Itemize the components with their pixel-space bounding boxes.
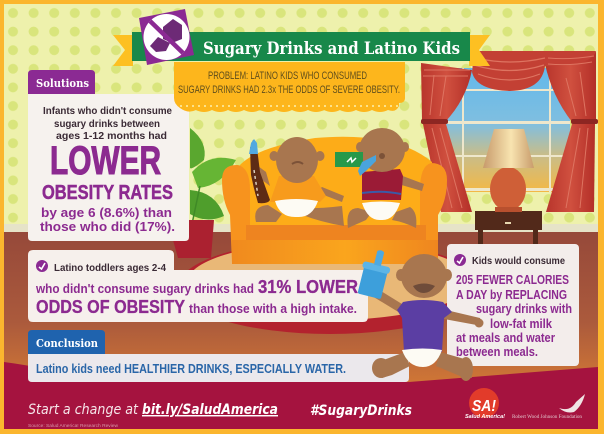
solutions card [28, 94, 189, 241]
conclusion text: Latino kids need HEALTHIER DRINKS, ESPECIALLY WATER. [36, 362, 346, 376]
logo: Salud America [465, 388, 505, 420]
baby on left with cola bottle [249, 137, 344, 226]
plant [173, 128, 236, 258]
kids finding: sugary drinks with [476, 301, 572, 316]
problem lace [180, 105, 400, 107]
conclusion tab: Conclusion [36, 337, 98, 350]
icon: no sugary drinks stamp [139, 9, 194, 65]
solutions tab: Solutions [36, 77, 89, 90]
text panel: toddlers [28, 250, 368, 322]
lamp shade [483, 129, 534, 168]
toddlers finding: 31% LOWER [258, 277, 358, 297]
curtains [421, 51, 598, 212]
footer call to action: bit.ly/SaludAmerica [142, 402, 278, 418]
green bottle [335, 152, 363, 167]
solutions tab [28, 70, 95, 94]
curtain swag [423, 51, 596, 91]
conclusion card [28, 354, 409, 382]
text panel: solutions [28, 70, 189, 241]
hashtag: #SugaryDrinks [310, 403, 412, 419]
sippy cup [358, 155, 376, 176]
logo: Salud America: Salud America! [465, 414, 505, 420]
text panel: kids would consume [447, 244, 579, 366]
title banner [113, 32, 490, 66]
kids finding: 205 FEWER CALORIES [456, 272, 569, 287]
toddlers card [28, 250, 368, 322]
sofa [222, 137, 447, 264]
right curtain [545, 52, 598, 212]
solutions rates text [40, 205, 175, 234]
solutions headline: LOWER [50, 139, 161, 183]
toddlers finding: than those with a high intake. [189, 301, 357, 316]
problem text [178, 70, 400, 96]
problem text: PROBLEM: LATINO KIDS WHO CONSUMED [208, 70, 367, 82]
title: Sugary Drinks and Latino Kids [203, 39, 460, 59]
floor [4, 232, 598, 382]
solutions rates text: those who did (17%). [40, 219, 175, 234]
source line: Source: Salud America! Research Review [28, 423, 119, 428]
kids finding: between meals. [456, 344, 538, 359]
solutions intro text: ages 1-12 months had [56, 130, 167, 142]
problem text: SUGARY DRINKS HAD 2.3x THE ODDS OF SEVERE OBESITY. [178, 84, 400, 96]
baby on right with sippy cup [335, 128, 424, 228]
lamp and side table [475, 129, 542, 244]
blue sippy cup [356, 247, 394, 300]
icon: check [36, 260, 48, 272]
kids finding [456, 272, 572, 359]
cola bottle [249, 139, 270, 203]
solutions headline [42, 139, 173, 204]
lamp base [490, 167, 526, 212]
solutions rates text: by age 6 (8.6%) than [41, 205, 172, 220]
footer call to action: Start a change at [28, 402, 139, 418]
solutions intro text: Infants who didn't consume [43, 105, 172, 117]
kids label: Kids would consume [472, 255, 565, 267]
toddlers finding: who didn't consume sugary drinks had [35, 281, 254, 296]
kids card [447, 244, 579, 366]
left curtain [421, 63, 472, 212]
solutions intro text: sugary drinks between [54, 118, 160, 130]
kids finding: at meals and water [456, 330, 555, 345]
solutions intro text [43, 105, 172, 142]
window [445, 68, 570, 192]
icon: check [454, 254, 466, 266]
logo: Robert Wood Johnson Foundation: Robert Wood Johnson Foundation [512, 415, 583, 420]
kids finding: low-fat milk [490, 316, 553, 331]
problem panel [174, 62, 405, 112]
toddlers finding [35, 277, 358, 317]
footer band [4, 362, 598, 429]
solutions headline: OBESITY RATES [42, 182, 173, 204]
table [475, 211, 542, 244]
baby in front with blue cup [356, 247, 484, 381]
rug [178, 240, 482, 334]
toddlers finding: ODDS OF OBESITY [36, 297, 185, 317]
plant pot [173, 220, 214, 258]
ribbon tails [113, 35, 490, 66]
logo: Salud America: SA! [472, 398, 497, 415]
conclusion tab [28, 330, 105, 354]
footer call to action [28, 402, 278, 418]
logo: Robert Wood Johnson Foundation [512, 394, 585, 420]
text panel: conclusion [28, 330, 409, 382]
kids finding: A DAY by REPLACING [456, 287, 567, 302]
toddlers label: Latino toddlers ages 2-4 [54, 262, 166, 274]
banner bar [132, 32, 470, 61]
